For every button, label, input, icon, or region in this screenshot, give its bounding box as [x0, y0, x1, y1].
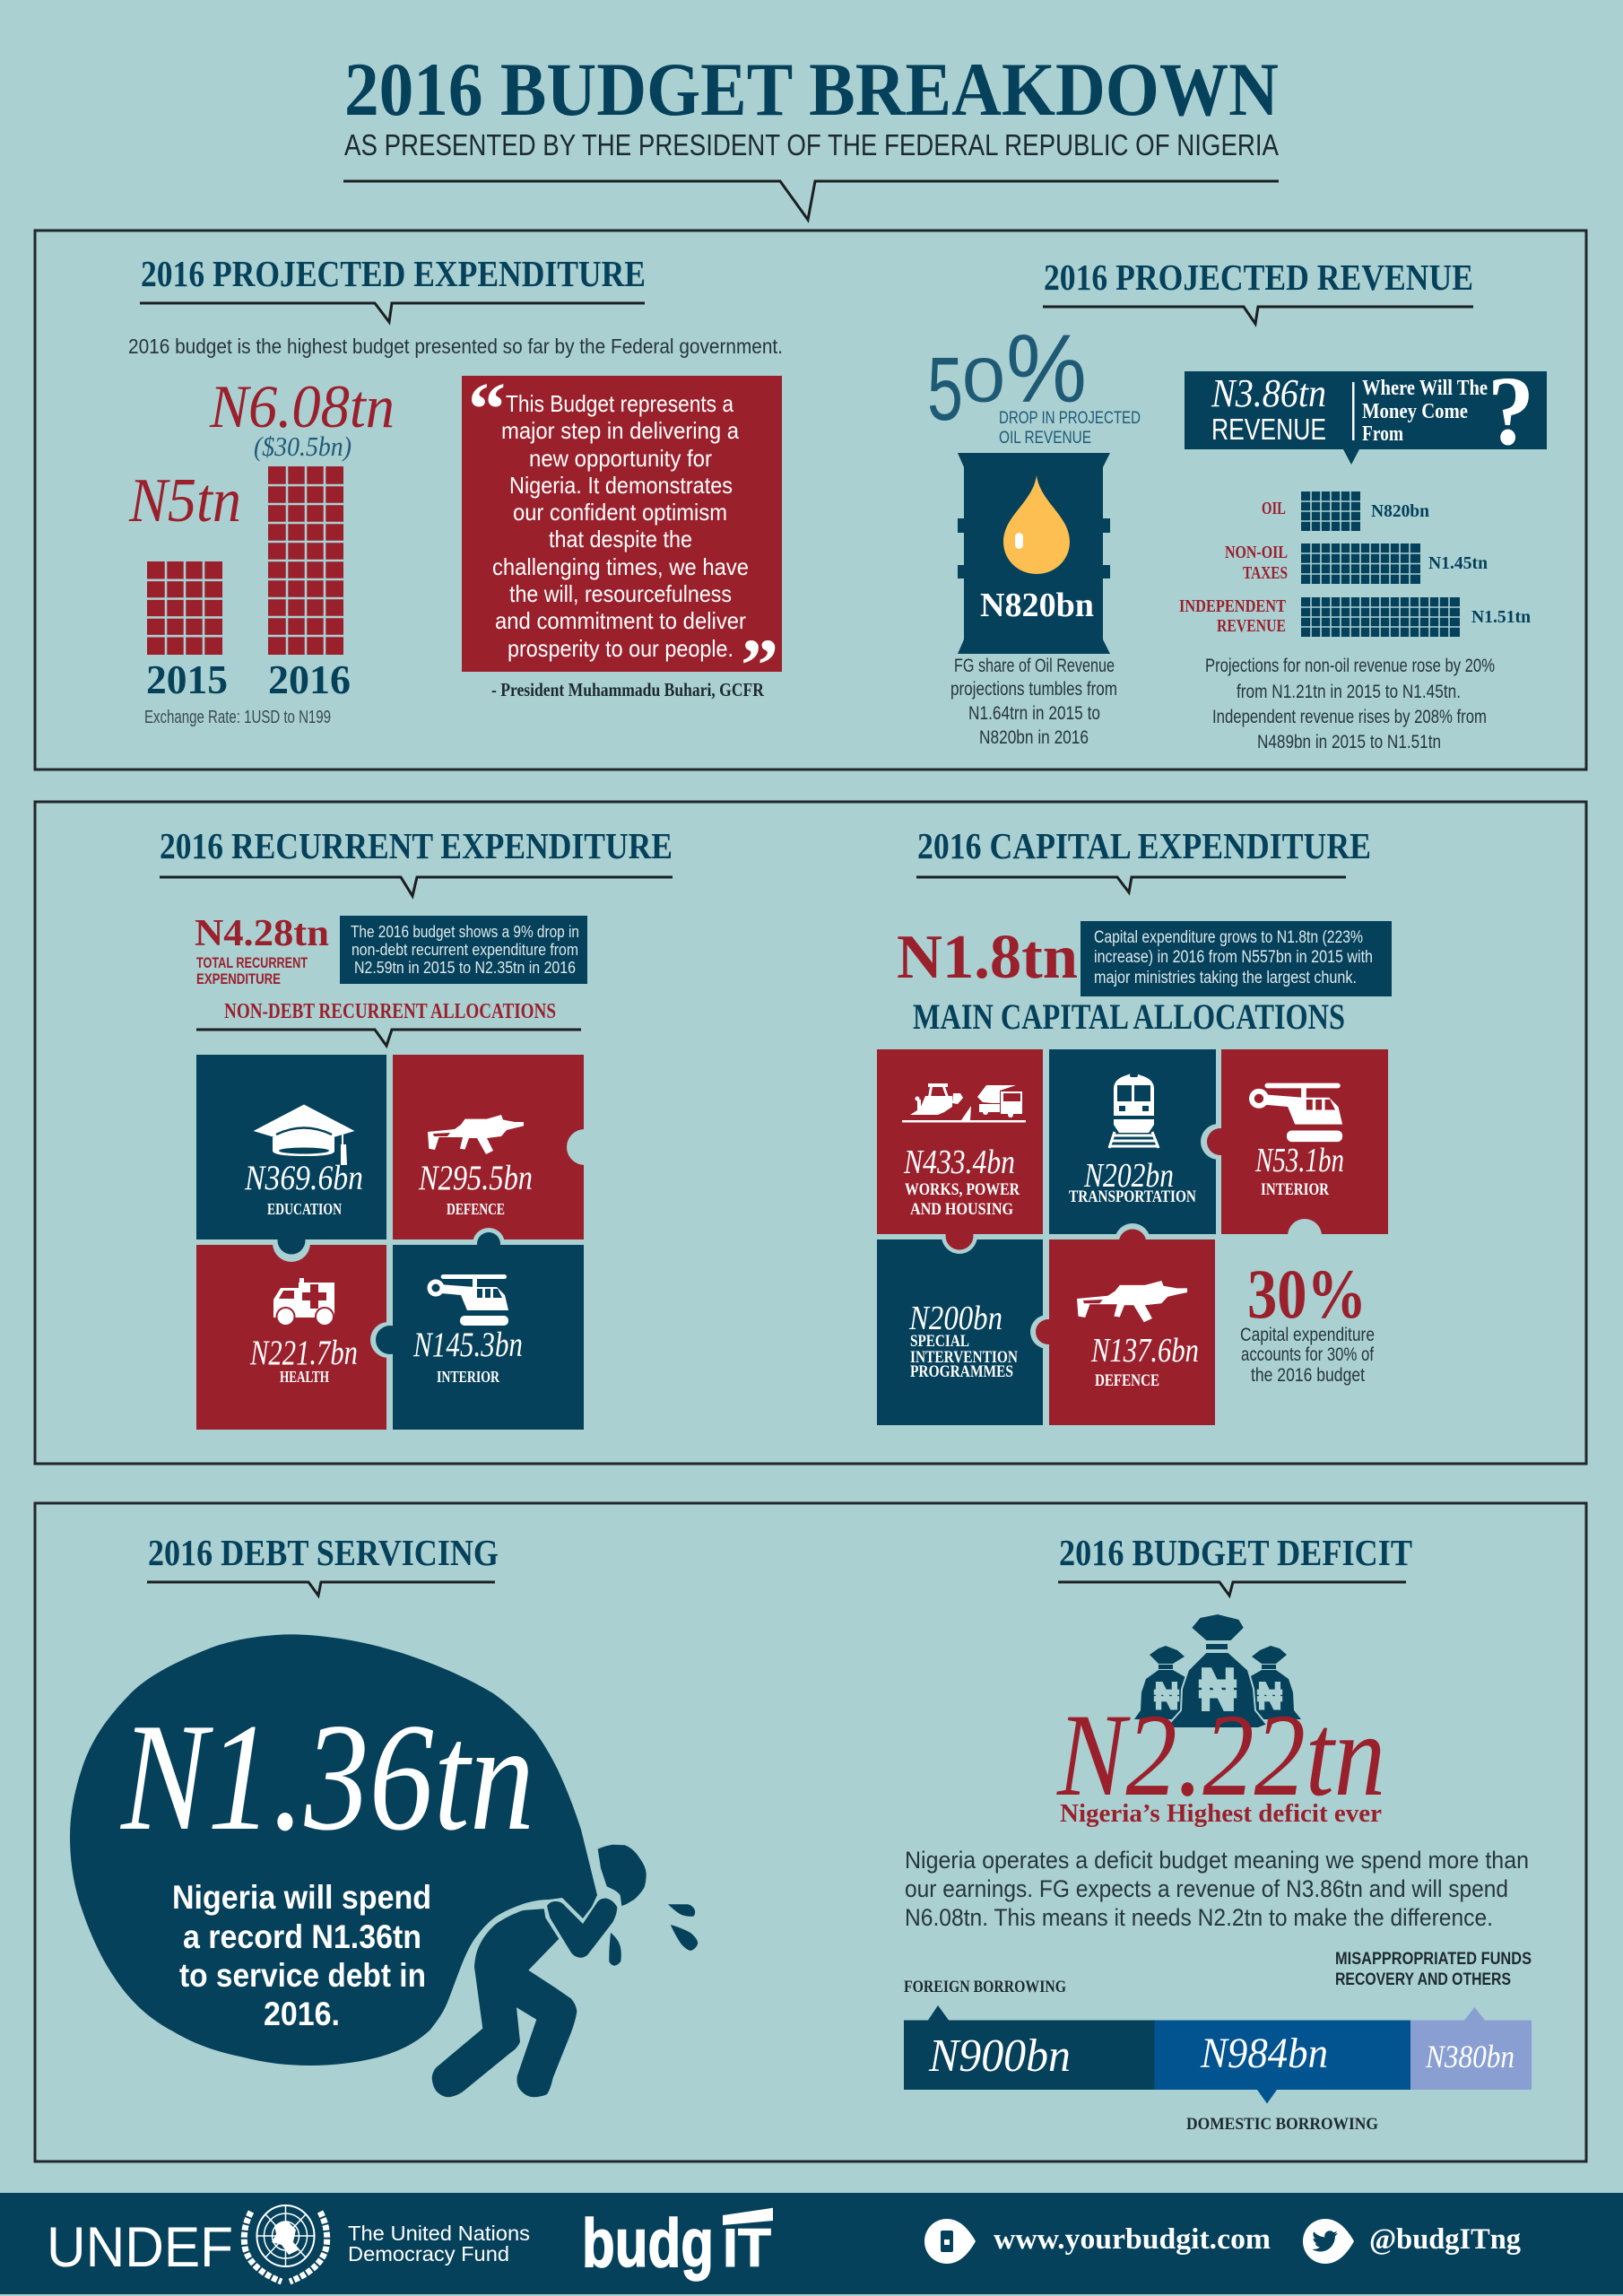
stat: 30 percent: 30%	[1247, 1255, 1367, 1333]
icon: website	[924, 2219, 976, 2264]
revenue chart row: independent revenue	[1179, 596, 1531, 637]
tile: special intervention programmes: N200bn	[908, 1300, 1002, 1337]
segment: misappropriated funds	[1410, 2007, 1532, 2090]
tile: special intervention programmes: INTERVENTION	[910, 1348, 1018, 1367]
callout: president quote: new opportunity for	[529, 445, 712, 472]
revenue chart row: oil: OIL	[1262, 499, 1286, 518]
icon: money bags: ₦	[1199, 1656, 1237, 1724]
stat: 30 percent: Capital expenditure	[1240, 1325, 1375, 1345]
callout: recurrent note: non-debt recurrent expenditure from	[352, 941, 578, 959]
heading rule: expenditure	[140, 303, 645, 322]
callout: revenue box: From	[1362, 422, 1403, 446]
icon: twitter	[1303, 2219, 1354, 2264]
heading: capital expenditure: 2016 CAPITAL EXPENDITURE	[917, 825, 1371, 866]
callout: president quote: This Budget represents a	[506, 390, 733, 417]
value: 50 percent	[927, 314, 1087, 439]
puzzle: capital allocations	[877, 1049, 1388, 1425]
tile: capital interior: INTERIOR	[1261, 1180, 1329, 1199]
text: revenue projections note: N489bn in 2015 to N1.51tn	[1257, 732, 1441, 752]
callout: revenue box: Money Come	[1362, 400, 1468, 423]
tile: transportation	[1069, 1074, 1196, 1206]
callout: president quote: the will, resourcefulness	[509, 580, 732, 607]
caption: total recurrent	[196, 954, 308, 987]
value: N5tn: N5tn	[128, 466, 241, 535]
value: N2.22tn: N2.22tn	[1056, 1689, 1385, 1821]
label: domestic borrowing: DOMESTIC BORROWING	[1186, 2115, 1378, 2134]
tile: education: N369.6bn	[244, 1159, 363, 1197]
tile: special intervention programmes: PROGRAMMES	[910, 1362, 1013, 1381]
tile: works, power and housing: AND HOUSING	[910, 1200, 1013, 1219]
segment: domestic borrowing	[1155, 2020, 1410, 2104]
tile: defence: N295.5bn	[418, 1159, 533, 1197]
tile: defence	[418, 1115, 533, 1218]
quote attribution: - President Muhammadu Buhari, GCFR	[491, 679, 765, 700]
icon: rifle	[428, 1115, 524, 1154]
callout: president quote: challenging times, we have	[492, 553, 749, 580]
callout: recurrent note	[340, 916, 587, 984]
callout: revenue box: REVENUE	[1211, 413, 1326, 446]
icon: helicopter	[430, 1274, 508, 1326]
callout: revenue box: Where Will The	[1362, 377, 1488, 400]
revenue chart row: non-oil taxes	[1225, 543, 1488, 584]
tile: health: N221.7bn	[249, 1334, 358, 1372]
tile: interior: N145.3bn	[412, 1326, 523, 1364]
link: twitter handle: @budgITng	[1369, 2223, 1521, 2256]
heading: projected revenue: 2016 PROJECTED REVENUE	[1044, 257, 1473, 298]
illustration: debt sack	[70, 1634, 597, 2066]
callout: president quote: prosperity to our people.	[508, 635, 733, 662]
heading: budget deficit: 2016 BUDGET DEFICIT	[1059, 1532, 1412, 1573]
heading: projected expenditure: 2016 PROJECTED EXPENDITURE	[141, 253, 646, 294]
icon: money bags: ₦	[1257, 1674, 1282, 1718]
callout: president quote: Nigeria. It demonstrates	[509, 472, 733, 499]
value: N6.08tn: N6.08tn	[209, 372, 395, 440]
text: oil revenue note: projections tumbles from	[950, 679, 1117, 700]
revenue chart row: independent revenue: N1.51tn	[1471, 607, 1531, 627]
intro text: 2016 budget is the highest budget presented so far by the Federal government.	[128, 335, 783, 358]
heading rule: capital	[916, 877, 1346, 892]
stat: 30 percent: the 2016 budget	[1251, 1365, 1365, 1386]
segment: foreign borrowing	[904, 2005, 1155, 2090]
icon: oil barrel: N820bn	[980, 587, 1094, 624]
tile: transportation: TRANSPORTATION	[1069, 1187, 1196, 1206]
callout: recurrent note: The 2016 budget shows a 9% drop in	[351, 923, 579, 941]
label: misappropriated funds	[1335, 1950, 1532, 1989]
text: UN Democracy Fund: Democracy Fund	[348, 2242, 509, 2266]
subheading rule	[196, 1030, 581, 1046]
text: deficit explanation	[905, 1847, 1529, 1931]
callout: capital note: major ministries taking the largest chunk.	[1094, 969, 1357, 987]
puzzle: recurrent allocations	[196, 1055, 603, 1430]
tile: capital defence: N137.6bn	[1090, 1332, 1199, 1370]
callout: capital note: Capital expenditure grows to N1.8tn (223%	[1094, 928, 1363, 947]
tile: works, power and housing: N433.4bn	[903, 1144, 1015, 1181]
subheading: main capital allocations: MAIN CAPITAL ALLOCATIONS	[913, 996, 1345, 1037]
label: 2016: 2016	[268, 657, 351, 702]
text: debt note: to service debt in	[179, 1957, 426, 1994]
value: N1.8tn: N1.8tn	[897, 923, 1078, 992]
callout: recurrent note: N2.59tn in 2015 to N2.35tn in 2016	[354, 959, 576, 977]
segment: domestic borrowing: N984bn	[1200, 2030, 1328, 2077]
value: dollars: ($30.5bn)	[254, 430, 352, 462]
caption: drop in oil revenue	[999, 409, 1141, 448]
value: 50 percent: 5	[927, 339, 963, 439]
value: 50 percent: %	[1006, 314, 1087, 422]
text: revenue projections note: Projections for non-oil revenue rose by 20%	[1205, 656, 1495, 676]
heading rule: recurrent	[160, 877, 673, 896]
grid chart: 2016	[268, 466, 343, 655]
callout: capital note: increase) in 2016 from N557bn in 2015 with	[1094, 948, 1373, 967]
grid chart: 2015	[147, 561, 222, 655]
value: N4.28tn: N4.28tn	[195, 913, 329, 954]
label: misappropriated funds: MISAPPROPRIATED FUNDS	[1335, 1950, 1532, 1969]
icon: oil drop	[1003, 475, 1070, 574]
subtitle: AS PRESENTED BY THE PRESIDENT OF THE FEDERAL REPUBLIC OF NIGERIA	[344, 128, 1279, 161]
tile: interior: INTERIOR	[437, 1368, 500, 1386]
callout: revenue box	[1185, 356, 1547, 465]
icon: money bags: ₦	[1154, 1674, 1179, 1718]
revenue chart row: non-oil taxes: NON-OIL	[1225, 543, 1288, 562]
icon: sweat drops	[609, 1904, 698, 1966]
heading rule: revenue	[1043, 307, 1473, 324]
tile: capital interior	[1252, 1083, 1344, 1199]
caption: total recurrent: TOTAL RECURRENT	[196, 954, 308, 971]
revenue chart row: non-oil taxes: TAXES	[1243, 563, 1288, 583]
tile: capital defence	[1077, 1281, 1199, 1390]
icon: graduation cap	[254, 1105, 355, 1165]
stat: 30 percent	[1240, 1255, 1375, 1386]
logo: budgIT: IT	[723, 2218, 771, 2278]
tile: special intervention programmes: SPECIAL	[910, 1332, 969, 1351]
tile: works, power and housing: WORKS, POWER	[905, 1180, 1020, 1199]
stat: 30 percent: accounts for 30% of	[1241, 1344, 1374, 1365]
text: debt note	[172, 1879, 431, 2032]
footer	[0, 2193, 1623, 2294]
text: oil revenue note: FG share of Oil Revenue	[954, 656, 1115, 676]
text: deficit explanation: Nigeria operates a deficit budget meaning we spend more than	[905, 1847, 1529, 1874]
text: revenue projections note: Independent revenue rises by 208% from	[1212, 707, 1487, 727]
tile: health	[249, 1278, 358, 1386]
text: revenue projections note	[1205, 656, 1495, 752]
text: UN Democracy Fund	[348, 2222, 530, 2266]
icon: train	[1109, 1074, 1159, 1148]
segment: foreign borrowing: N900bn	[928, 2031, 1071, 2082]
text: oil revenue note: N1.64trn in 2015 to	[968, 703, 1100, 724]
heading rule: deficit	[1058, 1582, 1406, 1596]
value: 50 percent: 0	[962, 345, 1005, 415]
callout: president quote: and commitment to deliver	[495, 607, 746, 634]
link: website: www.yourbudgit.com	[994, 2223, 1271, 2256]
header speech rule	[343, 181, 1279, 220]
revenue chart row: independent revenue: REVENUE	[1217, 616, 1286, 636]
callout: president quote: “	[468, 368, 506, 451]
icon: road construction vehicles	[902, 1083, 1026, 1123]
tile: special intervention programmes	[908, 1300, 1018, 1381]
text: oil revenue note	[950, 656, 1117, 748]
tile: works, power and housing	[902, 1083, 1026, 1219]
callout: president quote	[462, 368, 782, 708]
callout: president quote: major step in delivering a	[501, 417, 739, 444]
title: 2016 BUDGET BREAKDOWN	[344, 48, 1279, 132]
text: debt note: a record N1.36tn	[183, 1918, 421, 1955]
text: deficit explanation: N6.08tn. This means it needs N2.2tn to make the difference.	[905, 1904, 1493, 1931]
stacked bar: deficit financing	[904, 2005, 1532, 2104]
caption: total recurrent: EXPENDITURE	[196, 970, 281, 987]
exchange rate note: Exchange Rate: 1USD to N199	[144, 708, 331, 727]
caption: highest deficit: Nigeria’s Highest deficit ever	[1060, 1800, 1382, 1828]
value: N1.36tn: N1.36tn	[119, 1692, 534, 1863]
tile: capital defence: DEFENCE	[1095, 1371, 1159, 1390]
callout: president quote: ”	[741, 624, 778, 708]
icon: helicopter	[1252, 1083, 1342, 1142]
logo: UNDEF: UNDEF	[47, 2216, 233, 2279]
heading rule: debt	[147, 1582, 495, 1596]
panel: debt servicing and deficit	[35, 1503, 1586, 2161]
segment: misappropriated funds: N380bn	[1425, 2039, 1515, 2074]
logo: budgIT: budg	[582, 2205, 714, 2282]
tile: capital interior: N53.1bn	[1254, 1142, 1344, 1179]
text: UN Democracy Fund: The United Nations	[348, 2222, 530, 2245]
icon: ambulance	[273, 1278, 334, 1326]
illustration: man carrying sack	[432, 1845, 647, 2097]
text: oil revenue note: N820bn in 2016	[979, 727, 1089, 748]
label: misappropriated funds: RECOVERY AND OTHERS	[1335, 1970, 1511, 1989]
panel: projected expenditure and revenue	[35, 230, 1586, 770]
tile: interior	[412, 1274, 523, 1386]
callout: revenue box: N3.86tn	[1211, 371, 1326, 415]
revenue chart row: oil	[1262, 491, 1429, 531]
tile: health: HEALTH	[280, 1368, 329, 1386]
callout: capital note	[1081, 921, 1392, 996]
icon: money bags	[1134, 1613, 1301, 1728]
revenue chart row: independent revenue: INDEPENDENT	[1179, 596, 1287, 616]
tile: transportation: N202bn	[1083, 1157, 1174, 1195]
label: foreign borrowing: FOREIGN BORROWING	[904, 1978, 1066, 1996]
subheading: non-debt allocations: NON-DEBT RECURRENT ALLOCATIONS	[224, 1000, 556, 1023]
tile: education: EDUCATION	[267, 1200, 342, 1218]
tile: defence: DEFENCE	[447, 1200, 505, 1218]
text: debt note: 2016.	[264, 1996, 340, 2032]
icon: UN emblem	[244, 2205, 327, 2282]
label: 2015: 2015	[146, 657, 228, 702]
revenue chart row: oil: N820bn	[1371, 501, 1429, 521]
heading: recurrent expenditure: 2016 RECURRENT EXPENDITURE	[160, 825, 673, 866]
panel: recurrent and capital expenditure	[35, 802, 1586, 1464]
callout: president quote: that despite the	[549, 526, 692, 552]
text: deficit explanation: our earnings. FG expects a revenue of N3.86tn and will spend	[905, 1875, 1508, 1902]
callout: revenue box: ?	[1488, 356, 1534, 465]
text: debt note: Nigeria will spend	[172, 1879, 431, 1916]
revenue chart row: non-oil taxes: N1.45tn	[1428, 553, 1488, 573]
heading: debt servicing: 2016 DEBT SERVICING	[148, 1532, 499, 1573]
caption: drop in oil revenue: DROP IN PROJECTED	[999, 409, 1141, 428]
callout: president quote: our confident optimism	[513, 499, 727, 526]
text: revenue projections note: from N1.21tn in 2015 to N1.45tn.	[1237, 682, 1461, 702]
icon: oil barrel	[958, 453, 1110, 654]
tile: education	[244, 1105, 363, 1218]
caption: drop in oil revenue: OIL REVENUE	[999, 429, 1091, 448]
icon: rifle	[1077, 1281, 1187, 1322]
